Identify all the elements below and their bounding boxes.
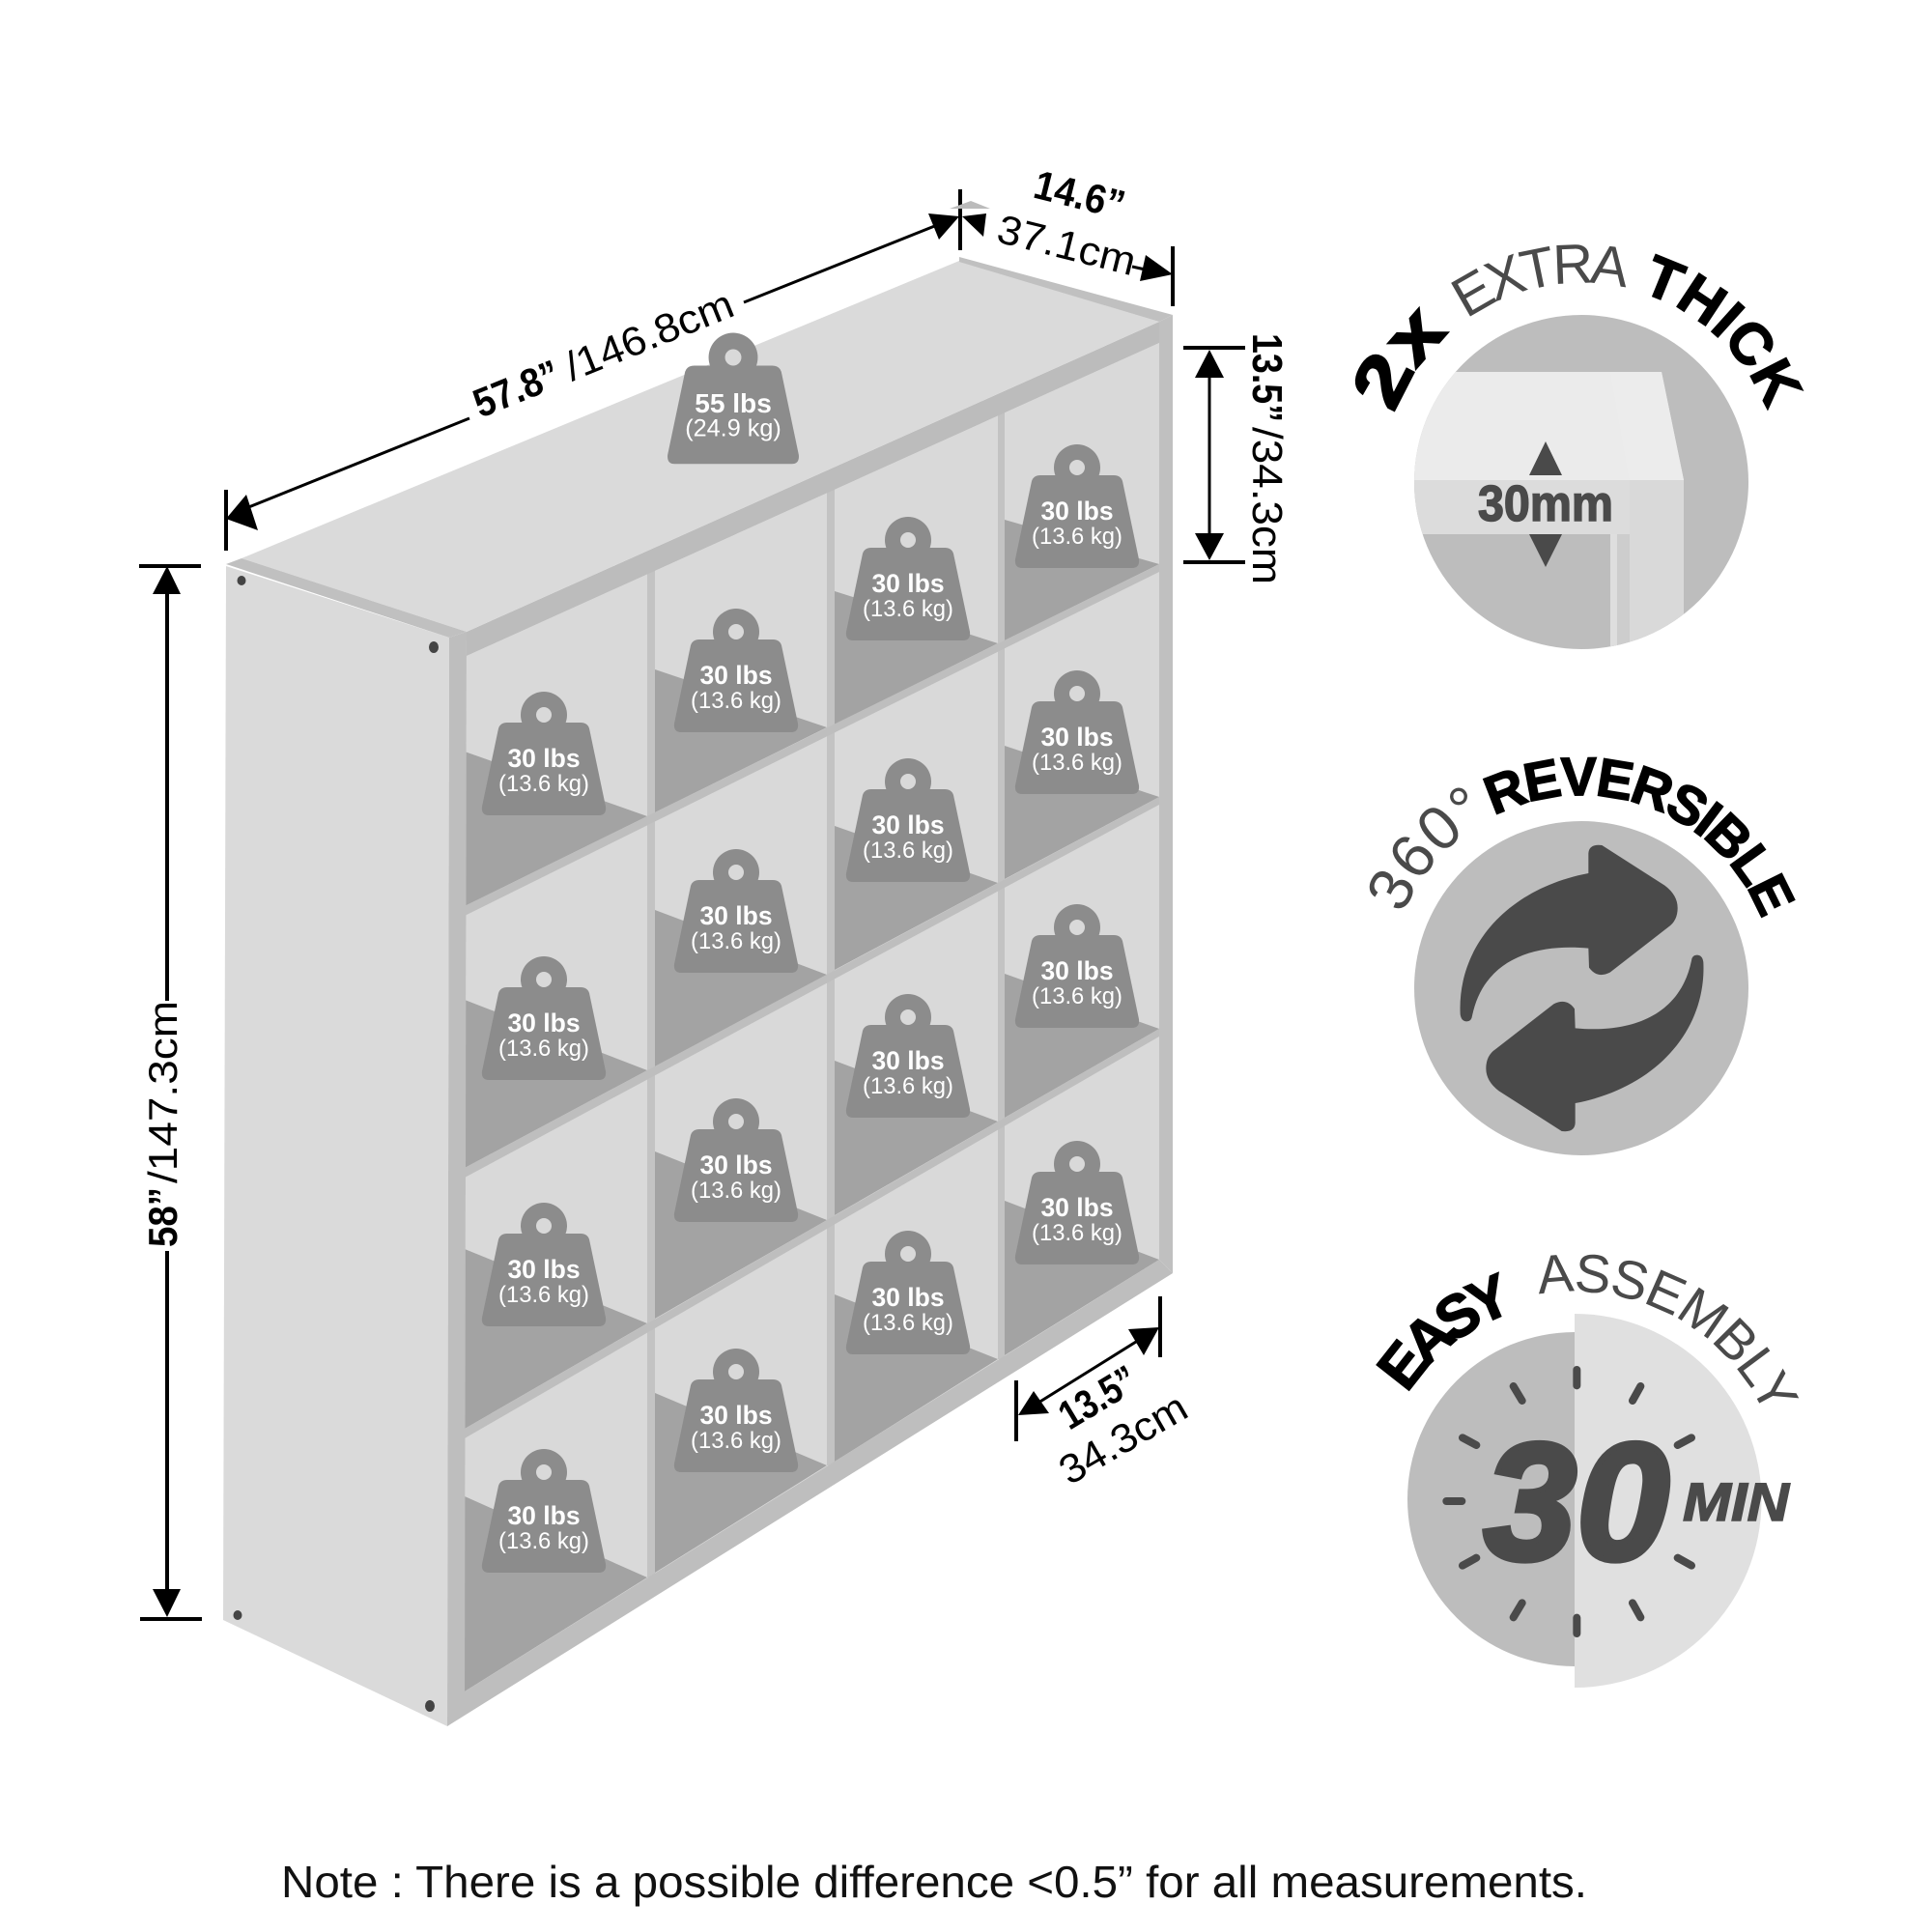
dimension: height 58	[139, 566, 202, 1619]
dimension: cube height 13.5: 13.5”	[1243, 333, 1291, 422]
weight: column 4 row 1	[1015, 444, 1139, 568]
screw holes	[234, 576, 439, 1712]
weight: column 3 row 4	[846, 1231, 970, 1354]
weight: column 3 row 1: 30 lbs	[871, 569, 945, 598]
dimension: height 58: 58”	[140, 1187, 185, 1247]
weight: column 2 row 4	[674, 1349, 798, 1472]
timer left half	[1407, 1332, 1575, 1666]
front left edge	[447, 632, 467, 1726]
dimension: width 57.8: 57.8”	[467, 351, 566, 426]
circular badge	[1414, 821, 1748, 1155]
weight: column 4 row 3: 30 lbs	[1040, 956, 1114, 985]
weight: column 3 row 3: 30 lbs	[871, 1046, 945, 1075]
weight: column 3 row 1	[846, 517, 970, 640]
circular badge	[1410, 309, 1758, 664]
shelf floors	[465, 520, 1159, 1691]
weight: column 2 row 3	[674, 1098, 798, 1222]
horizontal shelves	[465, 564, 1159, 1438]
weight: column 4 row 4	[1015, 1141, 1139, 1264]
weight: column 2 row 3: 30 lbs	[699, 1151, 773, 1179]
timer ticks	[1446, 1370, 1691, 1634]
curved heading: 2x	[1354, 305, 1450, 412]
weight: column 1 row 1: 30 lbs	[507, 744, 581, 773]
dimension: width 57.8	[226, 189, 960, 551]
bottom board edge	[447, 1260, 1173, 1726]
top back edges	[226, 558, 467, 638]
weight: column 4 row 2: (13.6 kg)	[1032, 750, 1122, 776]
top right edge	[959, 257, 1173, 322]
dimension: height 58: /147.3cm	[140, 1001, 185, 1183]
weight: top 55 lbs: (24.9 kg)	[685, 415, 781, 442]
curved heading: EASY	[1376, 1271, 1502, 1391]
curved heading: 360°	[1370, 788, 1467, 908]
weight: column 3 row 4: (13.6 kg)	[863, 1310, 953, 1336]
weight: column 3 row 2	[846, 758, 970, 882]
weight: top 55 lbs	[668, 333, 799, 464]
weight: column 1 row 3	[482, 1203, 606, 1326]
feature: 2x extra thick	[1354, 244, 1804, 649]
weight: column 4 row 1: (13.6 kg)	[1032, 524, 1122, 550]
weight: column 1 row 3: 30 lbs	[507, 1255, 581, 1284]
dimension: width 57.8: /146.8cm	[558, 281, 740, 389]
dimension: cube height 13.5	[1183, 333, 1291, 584]
weight: column 3 row 4: 30 lbs	[871, 1283, 945, 1312]
weight: column 3 row 1: (13.6 kg)	[863, 596, 953, 622]
curved heading: REVERSIBLE	[1482, 757, 1796, 918]
weight: top 55 lbs: 55 lbs	[695, 388, 772, 418]
weight: column 1 row 4: (13.6 kg)	[498, 1528, 589, 1554]
reversible arrows icon	[1461, 845, 1703, 1131]
weight: column 4 row 2: 30 lbs	[1040, 723, 1114, 752]
curved heading: ASSEMBLY	[1539, 1254, 1799, 1404]
dimension: cube width 13.5: 34.3cm	[1051, 1384, 1195, 1493]
MIN label: MIN	[1683, 1471, 1791, 1532]
back wall	[465, 343, 1159, 1691]
top face	[242, 261, 1159, 632]
weight: column 2 row 2: (13.6 kg)	[691, 928, 781, 954]
side panel	[223, 566, 449, 1726]
weight: column 4 row 4: (13.6 kg)	[1032, 1220, 1122, 1246]
dimension: depth 14.6: 37.1cm	[993, 206, 1141, 284]
weight: column 4 row 1: 30 lbs	[1040, 497, 1114, 526]
curved heading	[1354, 244, 1804, 412]
weight: column 1 row 3: (13.6 kg)	[498, 1282, 589, 1308]
weight: column 3 row 2: 30 lbs	[871, 810, 945, 839]
weight: column 2 row 4: (13.6 kg)	[691, 1428, 781, 1454]
feature: 360 reversible	[1370, 757, 1796, 1155]
vertical dividers	[647, 411, 1005, 1577]
weight: column 2 row 2: 30 lbs	[699, 901, 773, 930]
weight: column 4 row 3	[1015, 904, 1139, 1028]
weight: column 2 row 1	[674, 609, 798, 732]
curved heading: EXTRA	[1451, 244, 1627, 317]
weight: column 4 row 4: 30 lbs	[1040, 1193, 1114, 1222]
arrow up	[1529, 441, 1562, 475]
weight: column 3 row 2: (13.6 kg)	[863, 838, 953, 864]
weight: column 1 row 2	[482, 956, 606, 1080]
weight: column 1 row 1	[482, 692, 606, 815]
weight: column 3 row 3: (13.6 kg)	[863, 1073, 953, 1099]
infographic: cube bookcase dimensions and features	[139, 172, 1804, 1907]
weight: column 2 row 3: (13.6 kg)	[691, 1178, 781, 1204]
weight: column 4 row 3: (13.6 kg)	[1032, 983, 1122, 1009]
note: Note : There is a possible difference <0.5” for all measurements.	[281, 1857, 1587, 1907]
dimension: depth 14.6	[950, 161, 1173, 306]
30mm label: 30mm	[1478, 476, 1613, 532]
dimension: depth 14.6: 14.6”	[1030, 161, 1129, 228]
arrow down	[1529, 534, 1562, 567]
30 label: 30	[1484, 1409, 1669, 1595]
dimension: cube width 13.5: 13.5”	[1050, 1356, 1145, 1438]
timer right half	[1575, 1314, 1762, 1688]
feature: easy assembly 30 min	[1376, 1254, 1799, 1688]
weight: column 2 row 1: 30 lbs	[699, 661, 773, 690]
bookcase illustration	[223, 257, 1173, 1726]
curved heading: THICK	[1652, 253, 1804, 412]
weight: column 2 row 2	[674, 849, 798, 973]
dimension: cube height 13.5: /34.3cm	[1243, 427, 1291, 584]
weight: column 1 row 2: (13.6 kg)	[498, 1036, 589, 1062]
weight: column 1 row 1: (13.6 kg)	[498, 771, 589, 797]
dimension: cube width 13.5	[1016, 1296, 1195, 1493]
weight: column 1 row 4: 30 lbs	[507, 1501, 581, 1530]
weight: column 4 row 2	[1015, 670, 1139, 794]
underside of top board	[467, 322, 1159, 656]
weight: column 3 row 3	[846, 994, 970, 1118]
weight: column 2 row 4: 30 lbs	[699, 1401, 773, 1430]
weight: column 2 row 1: (13.6 kg)	[691, 688, 781, 714]
weight: column 1 row 4	[482, 1449, 606, 1573]
curved heading	[1370, 757, 1796, 918]
weight: column 1 row 2: 30 lbs	[507, 1009, 581, 1037]
right edge	[1159, 315, 1173, 1273]
curved heading	[1376, 1254, 1799, 1404]
